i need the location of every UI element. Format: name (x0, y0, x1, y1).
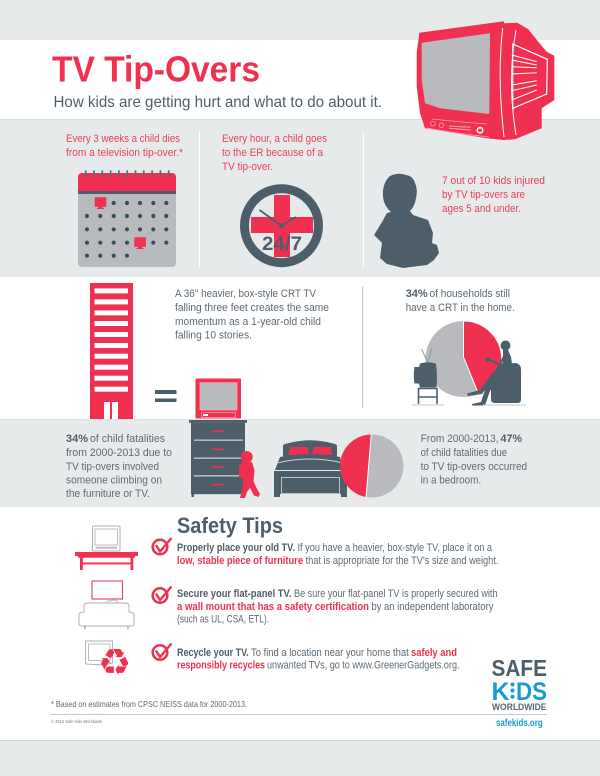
text: 34% of fatalities climbing: someone climbing on (66, 474, 162, 486)
title: TV Tip-Overs (52, 48, 260, 90)
logo: Safe Kids Worldwide: K (492, 678, 510, 706)
text: 34% of households: of households still (430, 288, 510, 300)
tip 1 text: Properly place your old TV. (177, 542, 295, 554)
pie chart: bedroom 47% (340, 434, 404, 498)
logo: Safe Kids Worldwide: WORLDWIDE (492, 702, 546, 713)
subtitle: How kids are getting hurt and what to do about it. (54, 94, 382, 111)
check mark 3 (153, 644, 172, 660)
stat text: every 3 weeks: from a television tip-over.* (66, 147, 184, 159)
icon: flat-panel TV above sofa (79, 581, 134, 629)
tip 1 text: that is appropriate for the TV's size and weight. (306, 555, 498, 567)
icon: dresser (189, 420, 247, 497)
text: CRT momentum: falling three feet creates the same (175, 302, 329, 314)
copyright: © 2016 Safe Kids Worldwide (51, 718, 102, 724)
text: 34% of households: have a CRT in the home. (406, 302, 515, 314)
text: 47% in a bedroom: to TV tip-overs occurred (421, 461, 527, 473)
stat text: ages 5 and under (442, 175, 545, 215)
tip 3 text: To find a location near your home that (251, 647, 409, 659)
heading: Safety Tips: Safety Tips (177, 513, 283, 538)
tip 3 text: responsibly recycles (177, 660, 265, 672)
text: 47% in a bedroom (421, 433, 527, 486)
stat text: ages 5 and under: 7 out of 10 kids injured (442, 175, 545, 187)
icon: TV with recycling symbol: ♻ (98, 641, 131, 684)
stat text: every hour (222, 133, 327, 173)
stat text: every hour: TV tip-over. (222, 161, 273, 173)
text: 47% in a bedroom: 47% (500, 433, 522, 445)
text: 34% of fatalities climbing: the furniture or TV. (66, 488, 150, 500)
stat text: every 3 weeks (66, 133, 184, 159)
icon: red building (90, 283, 133, 419)
tip 2 text: a wall mount that has a safety certification (177, 601, 369, 613)
icon: clock with medical cross (244, 189, 318, 263)
text: 34% of fatalities climbing (66, 433, 172, 500)
text: 34% of fatalities climbing: 34% (66, 433, 88, 445)
text: 47% in a bedroom: of child fatalities due (421, 447, 507, 459)
icon: bed (274, 440, 347, 498)
text: 34% of fatalities climbing: of child fatalities (90, 433, 165, 445)
footnote: * Based on estimates from CPSC NEISS data for 2000-2013. (51, 699, 247, 709)
icon: red climbing child (239, 451, 260, 498)
stat text: every hour: Every hour, a child goes (222, 133, 327, 145)
tip 2 text: by an independent laboratory (372, 601, 494, 613)
icon: calendar (78, 171, 176, 267)
stat text: ages 5 and under: ages 5 and under. (442, 203, 521, 215)
icon: red TV on dresser (196, 378, 241, 418)
logo: Safe Kids Worldwide: SAFE (492, 655, 547, 681)
icon: person in armchair (467, 340, 526, 406)
text: CRT momentum: falling 10 stories. (175, 330, 252, 342)
tip 2 text: Secure your flat-panel TV. (177, 588, 292, 600)
tip 3 text: unwanted TVs, go to www.GreenerGadgets.org. (267, 660, 460, 672)
equals sign (155, 390, 176, 402)
tip 1 text (177, 542, 498, 567)
icon: old TV on low table (75, 526, 138, 570)
icon: red CRT television (417, 21, 554, 140)
logo: Safe Kids Worldwide (492, 655, 547, 713)
icon: clock with medical cross: 24/7 (262, 234, 302, 255)
text: CRT momentum: A 36" heavier, box-style CRT TV (175, 288, 316, 300)
logo: Safe Kids Worldwide: DS (516, 678, 547, 706)
tip 3 text: Recycle your TV. (177, 647, 249, 659)
text: 34% of fatalities climbing: from 2000-2013 due to (66, 447, 172, 459)
icon: seated child silhouette (374, 174, 439, 268)
tip 1 text: If you have a heavier, box-style TV, place it on a (298, 542, 493, 554)
stat text: every hour: to the ER because of a (222, 147, 324, 159)
stat text: every 3 weeks: Every 3 weeks a child dies (66, 133, 180, 145)
text: 47% in a bedroom: From 2000-2013, (421, 433, 499, 445)
check mark 1 (153, 538, 172, 554)
stat text: ages 5 and under: by TV tip-overs are (442, 189, 525, 201)
tip 1 text: low, stable piece of furniture (177, 555, 303, 567)
pie chart: households with CRT and person watching TV (412, 321, 526, 406)
tip 2 text (177, 588, 498, 626)
text: 34% of households (406, 288, 515, 314)
text: 34% of households: 34% (406, 288, 428, 300)
check mark 2 (153, 586, 172, 603)
text: CRT momentum: momentum as a 1-year-old child (175, 316, 321, 328)
icon: small TV on stand (412, 348, 444, 406)
tip 2 text: (such as UL, CSA, ETL). (177, 614, 269, 626)
text: 47% in a bedroom: in a bedroom. (421, 474, 481, 486)
text: CRT momentum (175, 288, 329, 342)
website link: safekids.org (496, 717, 543, 729)
tip 3 text: safely and (411, 647, 457, 659)
text: 34% of fatalities climbing: TV tip-overs involved (66, 461, 159, 473)
tip 2 text: Be sure your flat-panel TV is properly secured with (294, 588, 498, 600)
tip 3 text (177, 647, 460, 672)
